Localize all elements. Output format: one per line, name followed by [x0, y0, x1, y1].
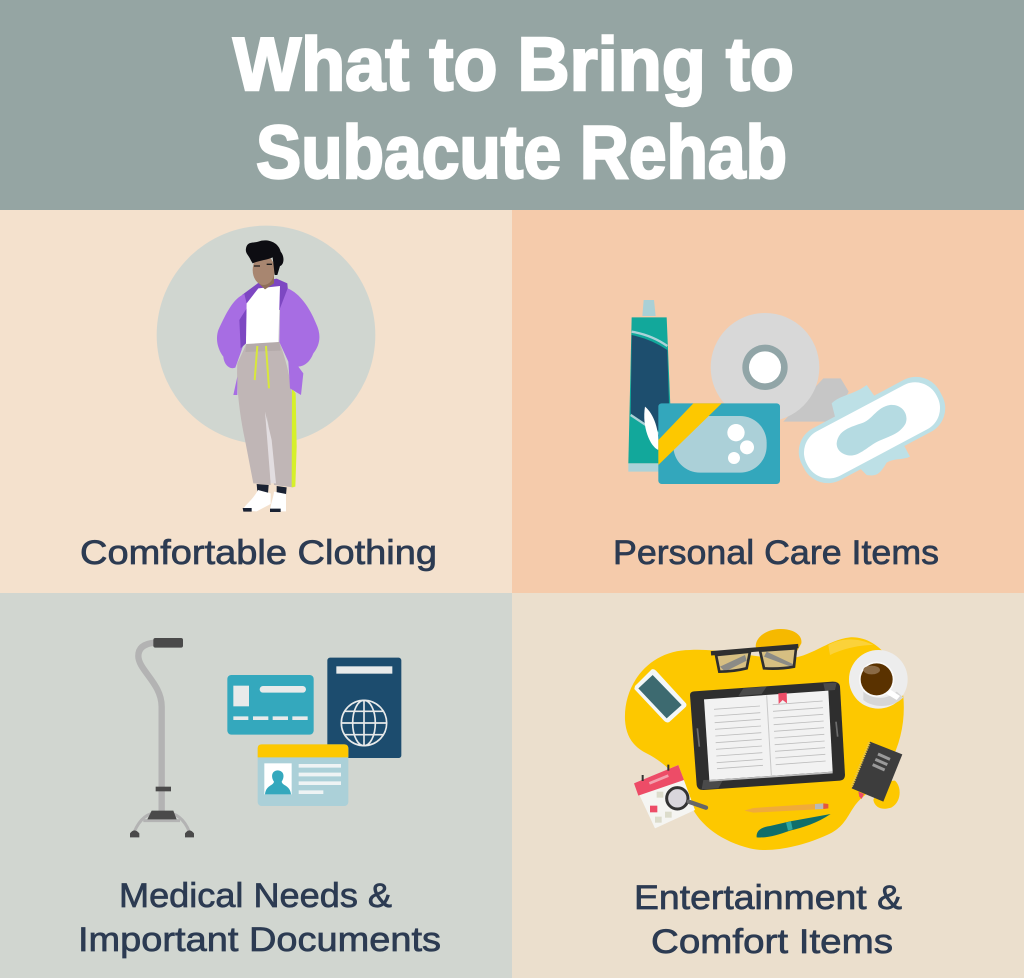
title: What to Bring to	[233, 22, 794, 106]
icon: person in casual clothing	[157, 226, 375, 512]
panel: personal care items	[512, 210, 1024, 593]
label: personal care items: Personal Care Items	[613, 534, 939, 572]
label: entertainment and comfort items: Comfort Items	[651, 923, 893, 961]
label: comfortable clothing: Comfortable Clothing	[80, 534, 437, 572]
label: medical needs and important documents: Important Documents	[78, 921, 441, 959]
panel: entertainment and comfort items	[512, 593, 1024, 978]
label: medical needs and important documents	[78, 877, 441, 959]
label: medical needs and important documents: Medical Needs &	[119, 877, 392, 915]
panel: medical needs and documents	[0, 593, 512, 978]
label: entertainment and comfort items	[634, 879, 902, 961]
label: entertainment and comfort items: Entertainment &	[634, 879, 902, 917]
icon: quad cane	[130, 638, 194, 837]
icon: toiletries	[628, 300, 955, 493]
icon: desk with book, tablet and accessories	[625, 629, 908, 850]
title	[233, 22, 794, 194]
icon: identity documents	[227, 658, 401, 806]
title: Subacute Rehab	[256, 110, 787, 194]
header banner	[0, 0, 1024, 210]
panel: comfortable clothing	[0, 210, 512, 593]
